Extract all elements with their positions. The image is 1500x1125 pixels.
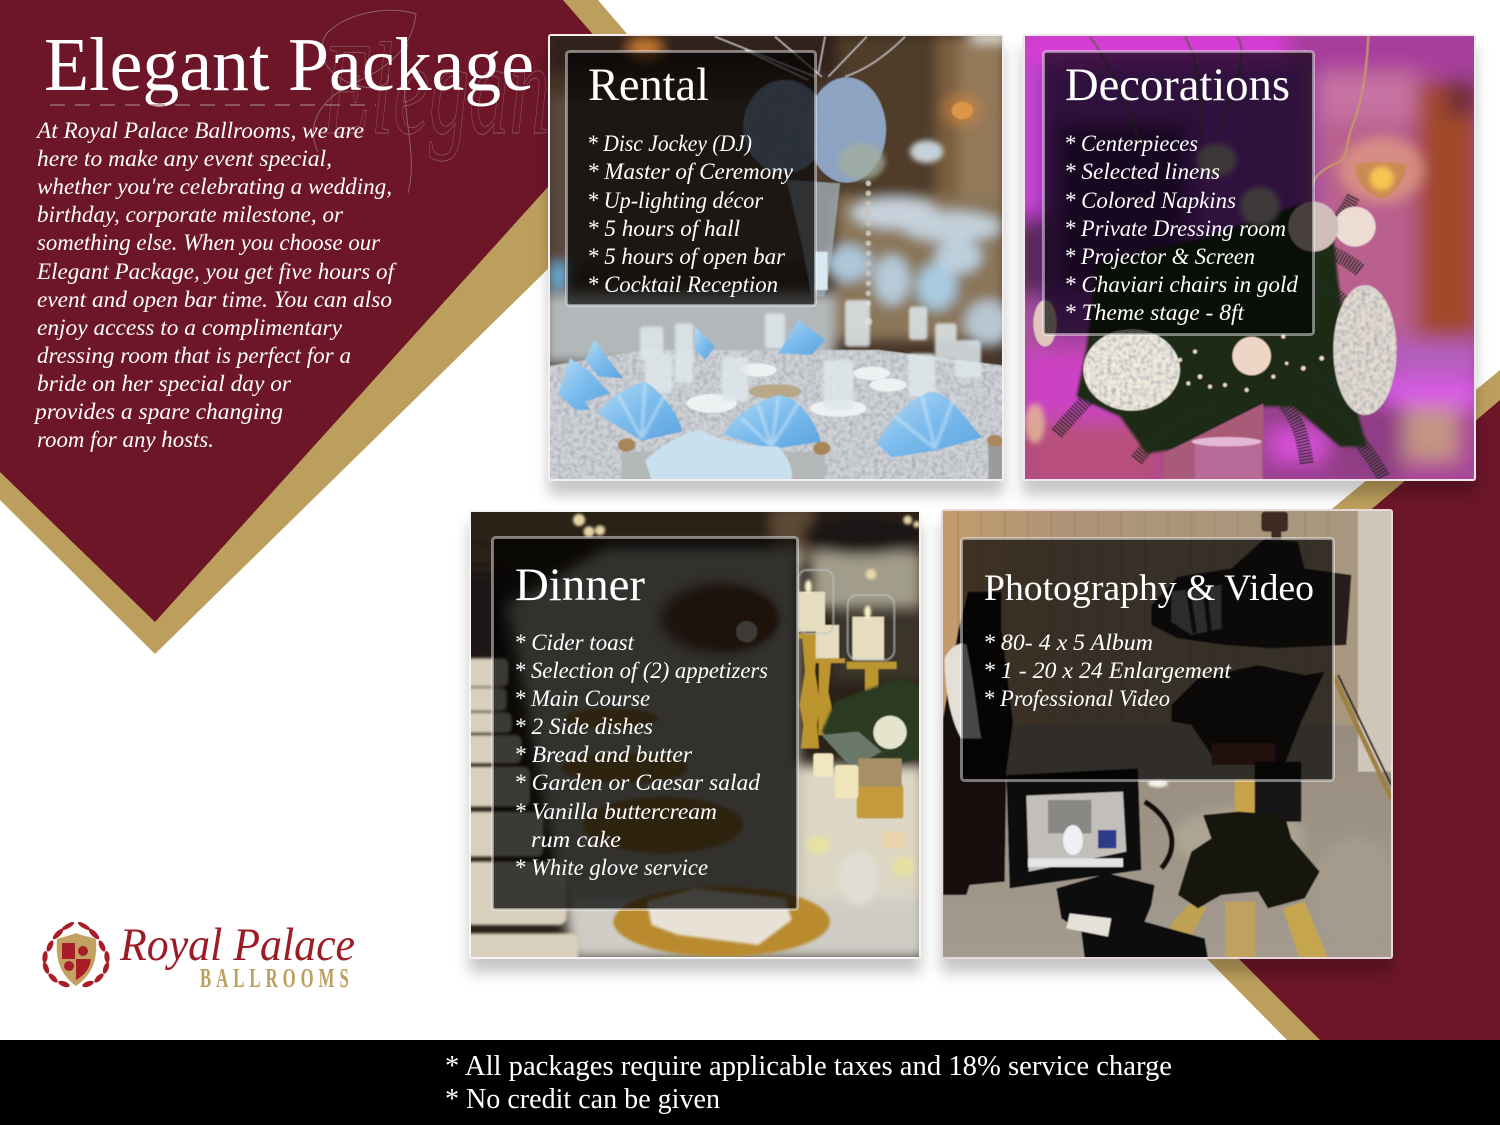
tripod head xyxy=(1171,665,1325,765)
floor reflections xyxy=(1168,808,1304,858)
photo: camera on gold tripod xyxy=(938,505,1405,972)
camera body xyxy=(1151,538,1351,648)
list: dinner items: rum cake xyxy=(531,827,621,852)
list: decoration items xyxy=(1064,131,1299,325)
intro text block: provides a spare changing xyxy=(33,399,283,424)
photo: candlelit dinner table xyxy=(465,505,932,972)
list: dinner items: * White glove service xyxy=(514,855,708,880)
field monitor xyxy=(1006,768,1141,888)
list: decoration items: * Chaviari chairs in gold xyxy=(1064,272,1299,297)
gold votive and glass xyxy=(857,785,903,818)
heading: rental: Rental xyxy=(588,59,709,111)
footer note: credit: * No credit can be given xyxy=(445,1083,720,1115)
intro text block: event and open bar time. You can also xyxy=(37,287,392,312)
burgundy chevron panel xyxy=(0,0,650,622)
intro text block: something else. When you choose our xyxy=(37,230,381,255)
list: dinner items: * Selection of (2) appetizers xyxy=(514,658,768,683)
gold tripod legs xyxy=(1234,778,1256,814)
text box: rental xyxy=(566,52,816,306)
dinner plates xyxy=(562,708,743,853)
text box: dinner xyxy=(492,538,798,910)
list: rental items xyxy=(587,131,794,297)
branches xyxy=(715,37,905,80)
list: dinner items: * Cider toast xyxy=(514,630,635,655)
hydrangeas xyxy=(743,80,827,173)
plates and glasses xyxy=(687,363,907,417)
chair cushions xyxy=(465,658,578,963)
list: dinner items: * Bread and butter xyxy=(514,742,693,767)
list: dinner items: * Main Course xyxy=(514,686,650,711)
list: rental items: * Master of Ceremony xyxy=(587,159,794,184)
branches xyxy=(1090,37,1242,143)
logo: Royal Palace Ballrooms xyxy=(42,919,355,993)
panel: photography and video xyxy=(938,505,1405,972)
photo: banquet table with blue napkins xyxy=(545,30,1012,497)
list: photography items: * 1 - 20 x 24 Enlargement xyxy=(983,658,1232,683)
panel: rental xyxy=(545,30,1012,497)
flowers and greenery xyxy=(822,678,922,768)
tablecloth xyxy=(550,349,1002,479)
distant wall light xyxy=(942,93,982,127)
list: photography items xyxy=(983,630,1232,711)
gold wire xyxy=(1313,35,1368,187)
logo subtitle: BALLROOMS xyxy=(200,963,349,993)
white hydrangeas xyxy=(1083,329,1180,411)
napkin fans xyxy=(558,320,982,457)
list: rental items: * 5 hours of open bar xyxy=(587,244,786,269)
decorative script watermark: Elegant xyxy=(321,15,574,162)
vase xyxy=(787,180,840,297)
burgundy lower right panel xyxy=(1090,400,1500,1040)
bokeh lights xyxy=(573,514,920,580)
cables and mount xyxy=(1145,802,1172,868)
text box: decorations xyxy=(1044,52,1314,334)
text box: photography and video xyxy=(962,538,1334,780)
gold band: top left chevron xyxy=(0,0,700,654)
wall sconce xyxy=(1338,137,1425,203)
list: decoration items: * Projector & Screen xyxy=(1064,244,1255,269)
list: decoration items: * Colored Napkins xyxy=(1064,188,1236,213)
list: photography items: * 80- 4 x 5 Album xyxy=(983,630,1153,655)
logo script wordmark: Royal Palace xyxy=(119,919,355,971)
intro text block: birthday, corporate milestone, or xyxy=(37,202,344,227)
small table candles xyxy=(1025,403,1045,443)
list: rental items: * Up-lighting décor xyxy=(587,188,764,213)
candle pillars xyxy=(798,592,884,660)
lower tripod head xyxy=(1178,812,1320,908)
list: rental items: * 5 hours of hall xyxy=(587,216,740,241)
intro text block: here to make any event special, xyxy=(37,146,332,171)
intro text block: bride on her special day or xyxy=(37,371,292,396)
icon: laurel crest xyxy=(42,921,110,988)
list: decoration items: * Theme stage - 8ft xyxy=(1064,300,1245,325)
heading: dinner: Dinner xyxy=(515,559,645,611)
intro text block: enjoy access to a complimentary xyxy=(37,315,343,340)
gold candle stands xyxy=(798,633,897,748)
list: decoration items: * Private Dressing room xyxy=(1064,216,1286,241)
roses xyxy=(1232,337,1271,375)
decorative script watermark xyxy=(313,10,574,193)
floral arrangement xyxy=(738,590,780,646)
list: decoration items: * Centerpieces xyxy=(1064,131,1198,156)
list: photography items: * Professional Video xyxy=(983,686,1170,711)
photo: floral centerpiece in magenta light xyxy=(1020,30,1487,497)
heading: photography and video: Photography & Video xyxy=(984,568,1314,609)
heading: decorations: Decorations xyxy=(1065,59,1290,111)
person in background xyxy=(943,592,1013,895)
gold band: right bottom xyxy=(1070,370,1500,1040)
list: rental items: * Cocktail Reception xyxy=(587,272,778,297)
panel: decorations xyxy=(1020,30,1487,497)
intro text block: room for any hosts. xyxy=(37,427,214,452)
list: decoration items: * Selected linens xyxy=(1064,159,1220,184)
list: dinner items: * Vanilla buttercream xyxy=(514,799,717,824)
fern foliage xyxy=(1077,203,1367,453)
glass vase xyxy=(1163,403,1263,480)
baby's breath xyxy=(1178,335,1324,392)
title: Elegant Package xyxy=(44,23,534,107)
footer note: taxes: * All packages require applicable taxes and 18% service charge xyxy=(445,1050,1172,1082)
list: dinner items: * Garden or Caesar salad xyxy=(514,770,760,795)
intro text block: At Royal Palace Ballrooms, we are xyxy=(35,118,364,143)
footer bar xyxy=(0,1040,1500,1125)
list: dinner items xyxy=(514,630,768,880)
intro text block: Elegant Package, you get five hours of xyxy=(36,259,398,284)
intro text block: whether you're celebrating a wedding, xyxy=(37,174,392,199)
intro text block xyxy=(33,118,398,452)
crystal strand xyxy=(864,181,872,326)
chair and bow xyxy=(622,452,825,480)
list: dinner items: * 2 Side dishes xyxy=(514,714,653,739)
panel: dinner xyxy=(465,505,932,972)
list: rental items: * Disc Jockey (DJ) xyxy=(587,131,752,156)
intro text block: dressing room that is perfect for a xyxy=(37,343,351,368)
